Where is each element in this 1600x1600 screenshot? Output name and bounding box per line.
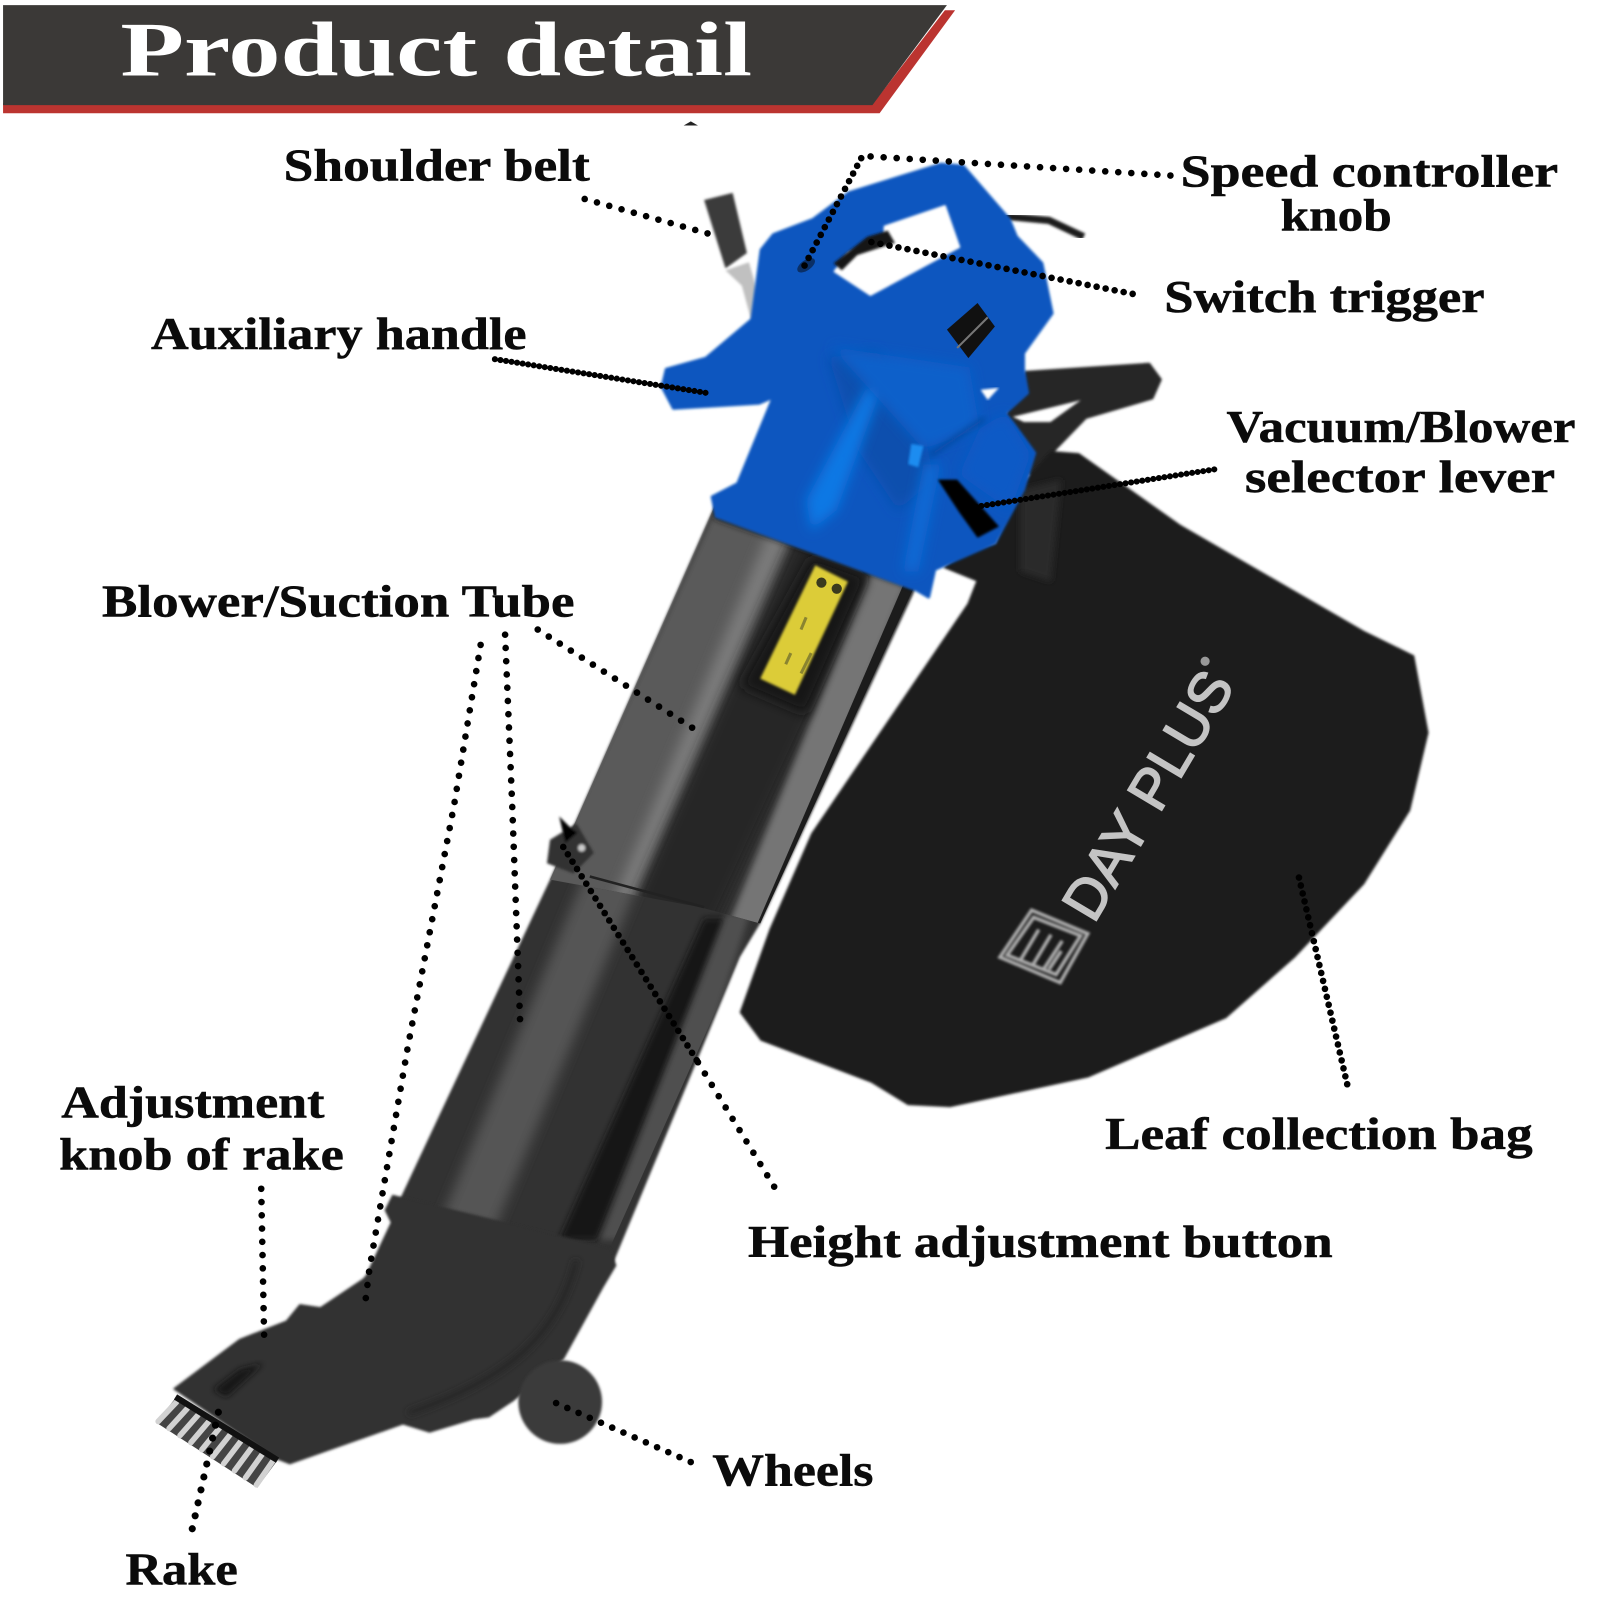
blue motor housing [662,164,1052,597]
switch trigger [834,231,895,270]
label: switch trigger: Switch trigger [1164,271,1485,322]
label: height adjustment button: Height adjustment button [748,1216,1333,1267]
label: shoulder belt: Shoulder belt [284,140,591,191]
label: speed controller knob: Speed controller [1181,146,1558,197]
label: vacuum blower selector lever [1227,401,1576,502]
leader line: inner tube [505,635,520,1030]
elbow shading [408,1260,577,1413]
leaf collection bag [741,452,1428,1106]
label: adjustment knob of rake [59,1076,344,1179]
leader line: auxiliary handle [495,359,706,393]
handle opening [835,206,959,295]
housing vent [947,303,995,358]
bag logo mark [1000,910,1088,983]
label: wheels: Wheels [712,1445,873,1496]
label: leaf collection bag: Leaf collection bag [1105,1108,1533,1159]
leader line: speed controller knob [803,156,1170,268]
label: blower suction tube: Blower/Suction Tube [102,575,574,626]
blower tube [393,495,931,1265]
small stray mark [684,121,698,126]
leader line: vacuum blower selector [967,469,1214,508]
leader line: wheels [556,1403,696,1464]
label: adjustment knob of rake: Adjustment [61,1076,325,1127]
registered mark [1201,657,1210,666]
heading: product detail: Product detail [120,7,752,93]
selector lever [938,480,999,538]
height adjustment button [547,816,594,873]
leader line: lower tube [365,645,481,1302]
leader line: switch trigger [870,242,1133,294]
power cord [1005,216,1084,237]
label: speed controller knob: knob [1281,190,1392,241]
wheel [518,1360,602,1444]
header banner [3,5,955,113]
leader line: height adjustment button [563,847,779,1194]
label: auxiliary handle: Auxiliary handle [151,308,527,359]
label: vacuum blower selector lever: selector lever [1245,451,1555,502]
leader line: blower tube [538,630,700,733]
vent gap [981,388,999,400]
warning sticker [760,565,848,695]
leader line: rake [192,1412,218,1531]
label: adjustment knob of rake: knob of rake [59,1128,344,1179]
product: leaf blower vacuum [156,164,1428,1488]
leader line: adjustment knob of rake [261,1189,264,1344]
rake teeth [156,1397,278,1488]
shoulder belt strap [704,193,767,327]
bag frame handle [1005,364,1160,480]
leader line: shoulder belt [585,199,719,237]
leader line: leaf collection bag [1299,878,1349,1092]
elbow nozzle [174,1196,615,1463]
speed controller knob [795,255,817,275]
bag collar [1021,482,1060,579]
label: rake: Rake [126,1544,238,1595]
label: vacuum blower selector lever: Vacuum/Blower [1227,401,1576,452]
label: speed controller knob [1181,146,1558,241]
rake adjustment knob recess [213,1363,263,1397]
bag brand text: DAY PLUS [1050,660,1247,931]
